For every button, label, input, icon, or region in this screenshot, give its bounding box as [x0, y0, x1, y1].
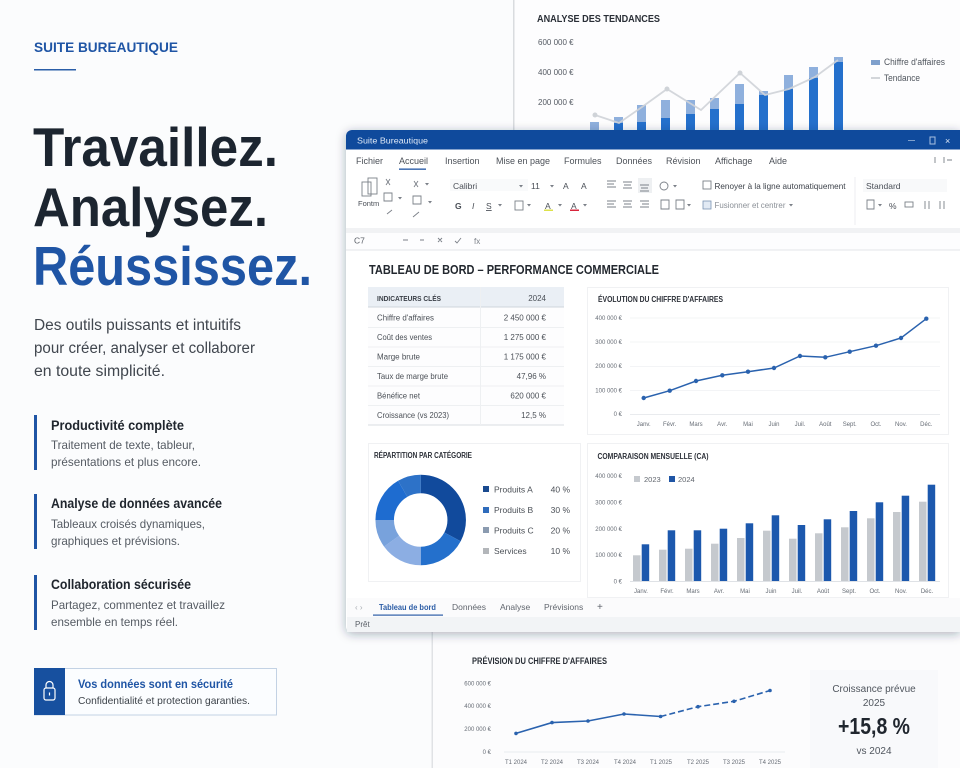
formula bar: fx [474, 237, 480, 246]
x axis: Sept. [842, 589, 856, 595]
feature: analyse: Analyse de données avancée [51, 496, 222, 511]
dark revenue bars [614, 62, 843, 132]
donut chart [385, 484, 457, 556]
donut legend: Produits B [494, 505, 534, 515]
font group [398, 179, 945, 211]
chart title: RÉPARTITION PAR CATÉGORIE [374, 451, 473, 460]
table: indicateurs clés: 1 175 000 € [504, 352, 547, 362]
x axis: Juin [768, 422, 780, 428]
sheet tabs: + [597, 602, 603, 613]
trend line [592, 60, 838, 123]
ribbon tabs: Accueil [399, 156, 428, 166]
headline: Travaillez. [33, 116, 278, 178]
axis labels [538, 38, 574, 107]
headline: Réussissez. [33, 235, 312, 297]
revenue line [642, 316, 928, 400]
growth card: +15,8 % [838, 713, 910, 739]
font group: A [545, 201, 551, 211]
x axis: Oct. [870, 422, 882, 428]
application window [346, 130, 960, 632]
forecast axis: 400 000 € [464, 704, 492, 710]
left column [33, 39, 312, 715]
clipboard group [358, 178, 421, 217]
forecast months: T2 2025 [687, 760, 710, 766]
panel: analyse des tendances [513, 0, 960, 132]
table: indicateurs clés: Marge brute [377, 352, 421, 362]
title bar: × [945, 136, 950, 146]
status bar: Prêt [355, 620, 370, 629]
x axis: Févr. [663, 422, 677, 428]
x axis: Janv. [637, 422, 651, 428]
headline [33, 116, 312, 297]
forecast months: T3 2025 [723, 760, 746, 766]
table: indicateurs clés: 620 000 € [510, 392, 547, 400]
sheet tabs: Prévisions [544, 602, 583, 612]
x axis: Déc. [920, 422, 933, 428]
number format: % [889, 201, 897, 211]
y axis: 200 000 € [595, 527, 623, 533]
x axis: Nov. [895, 422, 907, 428]
legend [634, 475, 695, 484]
x axis: Déc. [921, 589, 933, 595]
intro text [34, 317, 255, 380]
x axis: Juil. [792, 589, 803, 595]
x axis: Févr. [660, 589, 674, 595]
y axis: 200 000 € [595, 364, 623, 370]
sheet tabs [347, 598, 960, 617]
legend: Tendance [884, 73, 920, 83]
table: indicateurs clés: Coût des ventes [377, 333, 432, 342]
eyebrow label: SUITE BUREAUTIQUE [34, 39, 178, 55]
card: comparaison mensuelle [588, 444, 948, 598]
forecast months: T4 2025 [759, 760, 782, 766]
growth card [810, 670, 938, 768]
y axis: 400 000 € [595, 474, 623, 480]
ribbon tabs: Insertion [445, 156, 480, 166]
table: indicateurs clés: Chiffre d'affaires [377, 314, 434, 322]
light revenue bars [590, 57, 843, 132]
ribbon tabs: Affichage [715, 156, 752, 166]
donut legend: Produits A [494, 484, 533, 494]
forecast axis: 0 € [483, 750, 492, 756]
feature: productivité: présentations et plus encore. [51, 455, 201, 469]
growth card: 2025 [863, 698, 886, 709]
donut legend: Produits C [494, 526, 534, 536]
wrap and merge: Renoyer à la ligne automatiquement [714, 181, 846, 191]
x axis: Oct. [869, 589, 881, 595]
formula bar: C7 [354, 236, 365, 246]
clipboard group: Fontm [358, 199, 379, 208]
table: indicateurs clés: Taux de marge brute [377, 372, 449, 381]
donut legend: Services [494, 546, 527, 556]
axis labels: 400 000 € [538, 68, 574, 77]
forecast months: T1 2025 [650, 760, 673, 766]
x axis: Janv. [634, 589, 648, 595]
number format [863, 179, 947, 211]
forecast months: T3 2024 [577, 760, 600, 766]
x axis: Avr. [717, 422, 728, 428]
table: indicateurs clés [368, 287, 564, 426]
legend: 2024 [678, 475, 695, 484]
feature: productivité: Productivité complète [51, 418, 184, 433]
status bar [347, 617, 960, 632]
dashboard title: TABLEAU DE BORD – PERFORMANCE COMMERCIALE [369, 263, 659, 277]
feature: analyse: Tableaux croisés dynamiques, [51, 517, 205, 531]
x axis: Mars [686, 589, 700, 595]
x axis: Avr. [714, 589, 724, 595]
font group: A [581, 181, 587, 191]
font group: Calibri [453, 181, 477, 191]
wrap and merge [703, 181, 846, 210]
card: répartition par catégorie [368, 444, 580, 582]
wrap and merge: Fusionner et centrer [714, 200, 786, 210]
y axis: 300 000 € [595, 340, 623, 346]
growth card: Croissance prévue [832, 684, 916, 695]
x axis: Sept. [843, 422, 857, 428]
x axis [634, 589, 933, 595]
forecast months: T1 2024 [505, 760, 528, 766]
y axis: 300 000 € [595, 500, 623, 506]
title bar [346, 130, 960, 150]
x axis: Juin [765, 589, 777, 595]
legend: 2023 [644, 475, 661, 484]
intro text: pour créer, analyser et collaborer [34, 340, 255, 357]
donut legend [483, 484, 570, 556]
forecast axis: 200 000 € [464, 727, 492, 733]
ribbon tabs: Formules [564, 156, 602, 166]
chart title: COMPARAISON MENSUELLE (CA) [598, 452, 709, 461]
y axis [595, 474, 623, 586]
growth card: vs 2024 [856, 746, 892, 757]
x axis: Août [819, 422, 832, 428]
table: indicateurs clés: 2 450 000 € [504, 314, 547, 322]
font group: A [563, 181, 569, 191]
bars 2024 [642, 485, 935, 581]
table: indicateurs clés: Croissance (vs 2023) [377, 411, 449, 420]
dropdown carets [398, 183, 945, 206]
feature: collaboration [34, 575, 225, 630]
sheet tabs: Analyse [500, 602, 531, 612]
number format: Standard [866, 181, 901, 191]
sheet tabs: ‹ › [355, 603, 363, 612]
axis labels: 600 000 € [538, 38, 574, 47]
forecast axis [464, 682, 492, 756]
font group: 11 [531, 181, 540, 191]
title bar: Suite Bureautique [357, 136, 428, 146]
chart title: ÉVOLUTION DU CHIFFRE D'AFFAIRES [598, 295, 724, 304]
feature: collaboration: Partagez, commentez et travaillez [51, 598, 225, 612]
security callout: Vos données sont en sécurité [78, 677, 233, 691]
table: indicateurs clés: 2024 [528, 294, 547, 303]
donut legend: 20 % [551, 526, 570, 536]
sheet tabs: Données [452, 602, 486, 612]
ribbon tools [346, 177, 960, 233]
feature: collaboration: ensemble en temps réel. [51, 615, 178, 629]
intro text: Des outils puissants et intuitifs [34, 317, 241, 334]
y axis: 0 € [614, 412, 623, 418]
sheet tabs: Tableau de bord [379, 602, 436, 612]
ribbon tabs: Révision [666, 156, 701, 166]
panel: prévision [432, 628, 960, 768]
legend [871, 57, 945, 83]
security callout: Confidentialité et protection garanties. [78, 695, 250, 707]
font group: S [486, 201, 492, 211]
alignment group [607, 178, 684, 209]
security callout [34, 668, 276, 715]
y axis: 100 000 € [595, 388, 623, 394]
font group: I [472, 201, 475, 211]
panel title: ANALYSE DES TENDANCES [537, 13, 660, 25]
legend: Chiffre d'affaires [884, 57, 945, 67]
panel title: PRÉVISION DU CHIFFRE D'AFFAIRES [472, 656, 607, 666]
x axis: Mai [740, 589, 750, 595]
forecast months: T4 2024 [614, 760, 637, 766]
y axis: 0 € [614, 580, 623, 586]
x axis: Mai [743, 422, 753, 428]
font group: G [455, 201, 462, 211]
x axis: Nov. [895, 589, 907, 595]
y axis: 100 000 € [595, 553, 623, 559]
donut legend: 40 % [551, 484, 570, 494]
forecast axis: 600 000 € [464, 682, 492, 688]
ribbon tabs: Fichier [356, 156, 383, 166]
x axis [637, 422, 933, 428]
forecast months [505, 760, 782, 766]
y axis [595, 316, 623, 418]
feature: analyse [34, 494, 222, 549]
icon: padlock [44, 682, 55, 700]
headline: Analysez. [33, 176, 268, 238]
ribbon tabs [356, 156, 952, 170]
feature: collaboration: Collaboration sécurisée [51, 577, 191, 592]
donut legend: 10 % [551, 546, 570, 556]
ribbon tabs: Mise en page [496, 156, 550, 166]
feature: productivité [34, 415, 201, 470]
ribbon tabs: Aide [769, 156, 787, 166]
bars 2023 [633, 502, 926, 581]
intro text: en toute simplicité. [34, 363, 165, 380]
donut legend: 30 % [551, 505, 570, 515]
table: indicateurs clés: Bénéfice net [377, 392, 421, 400]
x axis: Août [817, 589, 830, 595]
forecast months: T2 2024 [541, 760, 564, 766]
formula bar [346, 233, 960, 250]
table: indicateurs clés: 1 275 000 € [504, 333, 547, 342]
table: indicateurs clés: 12,5 % [521, 411, 546, 420]
feature: productivité: Traitement de texte, tableur, [51, 438, 195, 452]
forecast line [514, 689, 772, 735]
x axis: Juil. [795, 422, 806, 428]
table: indicateurs clés: 47,96 % [517, 372, 546, 381]
table: indicateurs clés: INDICATEURS CLÉS [377, 294, 441, 303]
font group: A [571, 201, 577, 211]
y axis: 400 000 € [595, 316, 623, 322]
axis labels: 200 000 € [538, 98, 574, 107]
x axis: Mars [689, 422, 703, 428]
card: évolution du chiffre d'affaires [588, 288, 948, 434]
ribbon tabs: Données [616, 156, 653, 166]
feature: analyse: graphiques et prévisions. [51, 534, 180, 548]
